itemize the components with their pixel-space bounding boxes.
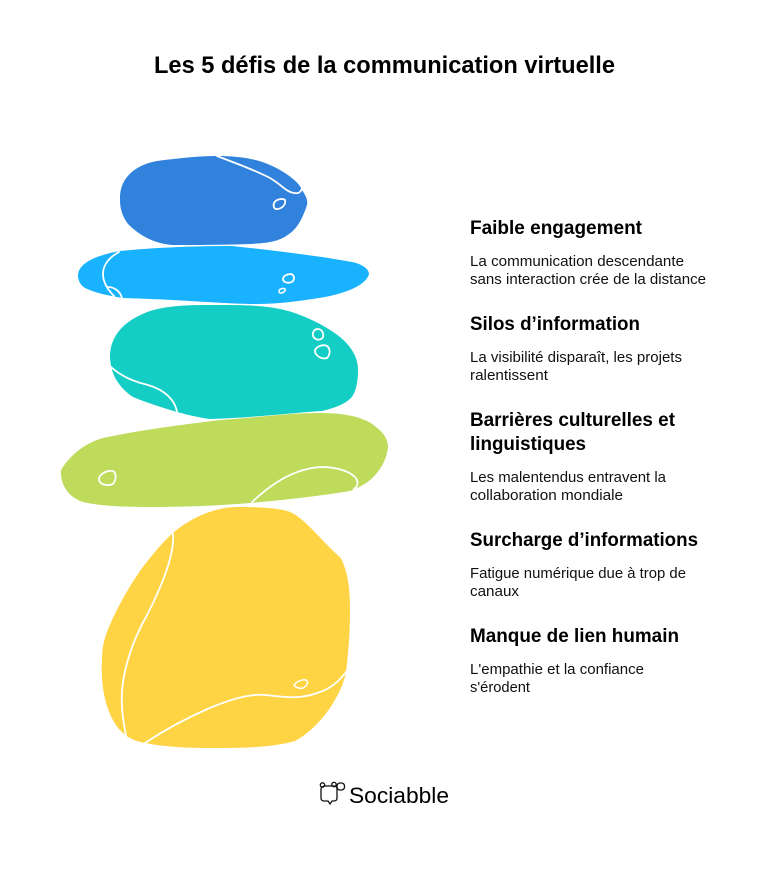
item: Barrières culturelles et linguistiques: Barrières culturelles et	[470, 410, 676, 431]
stone 3: teal	[110, 305, 358, 419]
item: Manque de lien humain: Manque de lien humain	[470, 626, 679, 647]
item: Surcharge d'informations: Surcharge d’informations	[470, 530, 698, 551]
stone 4: lime green	[61, 413, 388, 507]
item: Silos d'information	[470, 314, 682, 384]
title: Les 5 défis de la communication virtuelle	[154, 52, 615, 79]
logo: Sociabble	[320, 782, 449, 808]
item: Barrières culturelles et linguistiques: collaboration mondiale	[470, 488, 623, 504]
item: Silos d'information: La visibilité disparaît, les projets	[470, 350, 682, 366]
item: Manque de lien humain: L'empathie et la confiance	[470, 662, 644, 678]
item: Barrières culturelles et linguistiques	[470, 410, 676, 504]
stone 5: yellow	[102, 507, 350, 748]
item: Surcharge d'informations: Fatigue numérique due à trop de	[470, 566, 686, 582]
item: Silos d'information: Silos d’information	[470, 314, 640, 335]
item: Silos d'information: ralentissent	[470, 368, 548, 384]
wordmark: Sociabble	[349, 783, 449, 808]
item: Surcharge d'informations	[470, 530, 698, 600]
stone stack	[61, 156, 388, 748]
item: Faible engagement	[470, 218, 706, 288]
item: Faible engagement: La communication descendante	[470, 254, 684, 270]
item: Surcharge d'informations: canaux	[470, 584, 520, 600]
item: Manque de lien humain: s'érodent	[470, 680, 530, 696]
item: Faible engagement: Faible engagement	[470, 218, 643, 239]
item: Barrières culturelles et linguistiques: Les malentendus entravent la	[470, 470, 667, 486]
item: Faible engagement: sans interaction crée de la distance	[470, 272, 706, 288]
stone 2: sky blue	[78, 246, 369, 304]
icon: speech bubbles	[320, 782, 344, 804]
item: Barrières culturelles et linguistiques: linguistiques	[470, 434, 586, 455]
item: Manque de lien humain	[470, 626, 679, 696]
stone 1: dark blue	[120, 156, 307, 245]
